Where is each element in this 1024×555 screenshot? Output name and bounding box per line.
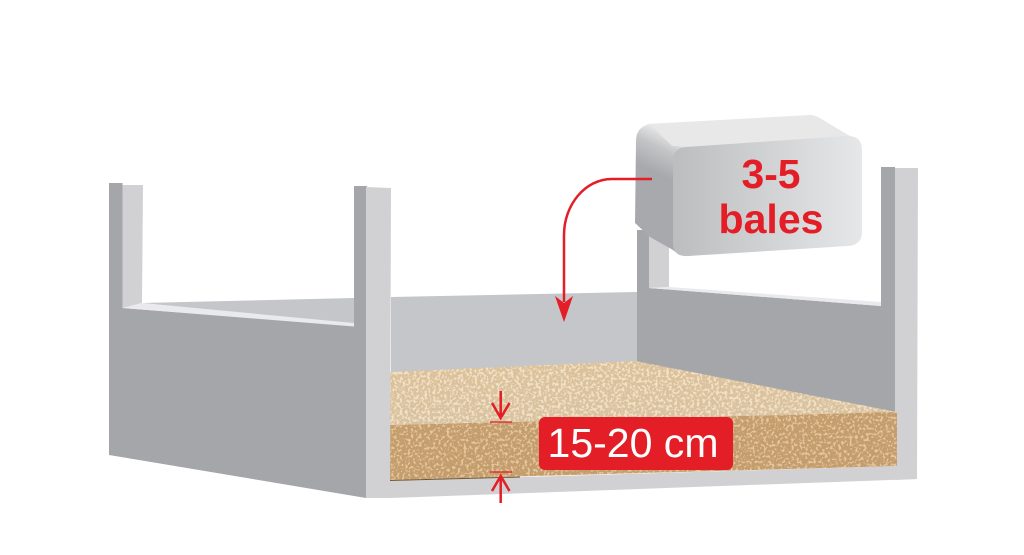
front post	[366, 187, 391, 498]
back wall	[142, 292, 638, 380]
left wall	[109, 183, 367, 498]
depth marker: top arrow	[490, 391, 512, 422]
bedding front layer	[390, 412, 897, 480]
right post	[895, 168, 918, 480]
bale count label	[718, 151, 824, 242]
bale count label: bales	[718, 196, 824, 242]
bale count label: 3-5	[742, 151, 800, 197]
right side wall	[637, 167, 895, 420]
depth marker: bottom arrow	[490, 472, 512, 503]
curved arrow from bale to pen	[555, 179, 652, 322]
depth label: 15-20 cm	[548, 420, 718, 466]
floor front edge	[390, 465, 917, 498]
infographic: bedding in a pen	[109, 115, 918, 503]
bedding top surface	[390, 361, 896, 425]
hay bale	[635, 115, 862, 256]
